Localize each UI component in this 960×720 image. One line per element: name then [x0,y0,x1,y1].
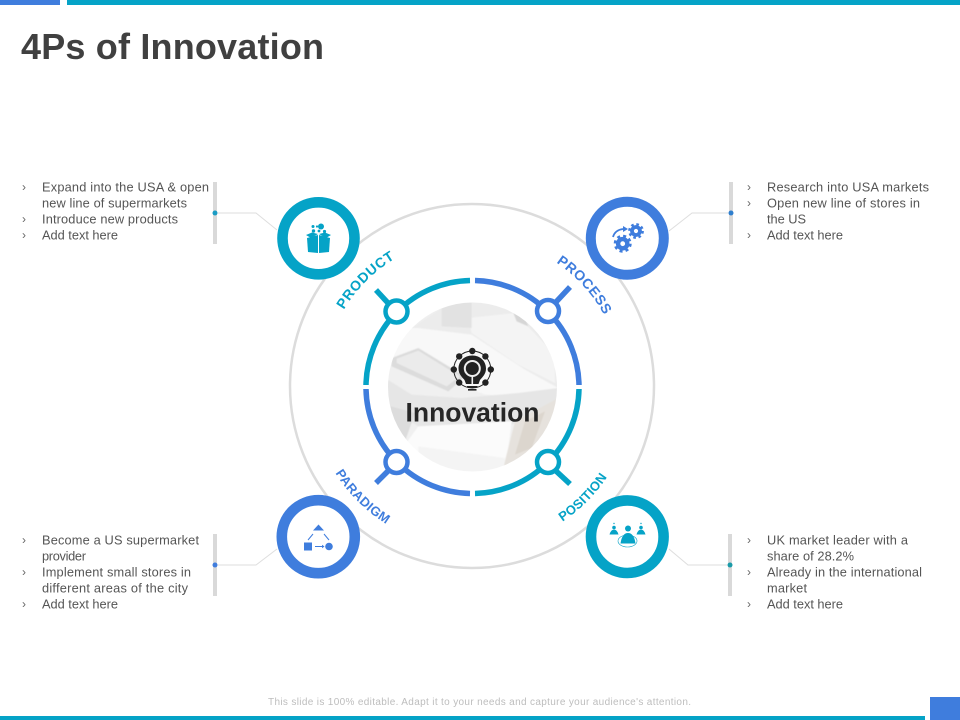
text block: paradigm: › [22,565,26,579]
text block: product [22,180,209,242]
badge: position [591,500,664,573]
text block: position: › [747,565,751,579]
text block: position: share of 28.2% [767,548,854,564]
title: 4Ps of Innovation [21,26,324,67]
text block: product: Introduce new products [42,212,178,226]
center photo [385,298,561,474]
ring segment: paradigm [366,389,470,494]
text block: position: UK market leader with a [767,532,909,548]
label: product: PRODUCT [336,250,392,309]
icon: gears [613,224,643,251]
badge: product [282,202,354,274]
text block: process: Research into USA markets [767,180,929,194]
text block: position: › [747,533,751,547]
bottom accent bar [0,697,960,720]
text block: process: › [747,180,751,194]
connector: position [669,534,732,596]
outer ring [290,204,654,568]
text block: process: › [747,196,751,210]
badge: paradigm [282,500,355,573]
label: paradigm: PARADIGM [336,468,390,524]
icon: open box [306,224,331,253]
text block: product: Add text here [42,228,118,242]
ring segment: process [475,280,579,385]
text block: process: Add text here [767,228,843,242]
text block: process: Open new line of stores in [767,196,920,210]
text block: process [747,180,929,242]
text block: process: the US [767,212,806,226]
text block: product: › [22,212,26,226]
connector: product [212,182,277,244]
node: paradigm [376,451,408,483]
text block: position [747,532,922,612]
text block: position: › [747,597,751,611]
node: process [537,287,570,322]
text block: paradigm: different areas of the city [42,580,189,596]
text block: position: Add text here [767,596,843,612]
connector: paradigm [212,534,277,596]
icon: innovation bulb [451,348,494,391]
label: position: POSITION [558,472,607,522]
node: product [376,290,408,322]
text block: product: › [22,180,26,194]
text block: position: market [767,580,807,596]
ring segment: product [366,280,470,385]
text block: product: › [22,228,26,242]
footer note: This slide is 100% editable. Adapt it to your needs and capture your audience's attention. [268,697,691,708]
text block: paradigm: › [22,597,26,611]
text block: position: Already in the international [767,564,922,580]
icon: shapes cycle [304,524,333,550]
ring segment: position [475,389,579,494]
node: position [537,451,570,484]
text block: product: new line of supermarkets [42,196,187,210]
icon: people [610,523,646,547]
text block: paradigm: Add text here [42,596,118,612]
text block: process: › [747,228,751,242]
text block: paradigm: provider [42,548,87,564]
connector: process [669,182,734,244]
badge: process [591,202,664,275]
text block: paradigm: › [22,533,26,547]
text block: paradigm [22,532,199,612]
top accent bar [0,0,960,5]
text block: paradigm: Implement small stores in [42,564,191,580]
text block: paradigm: Become a US supermarket [42,532,199,548]
text block: product: Expand into the USA & open [42,180,209,194]
label: process: PROCESS [557,255,611,314]
center heading: Innovation [406,398,539,428]
